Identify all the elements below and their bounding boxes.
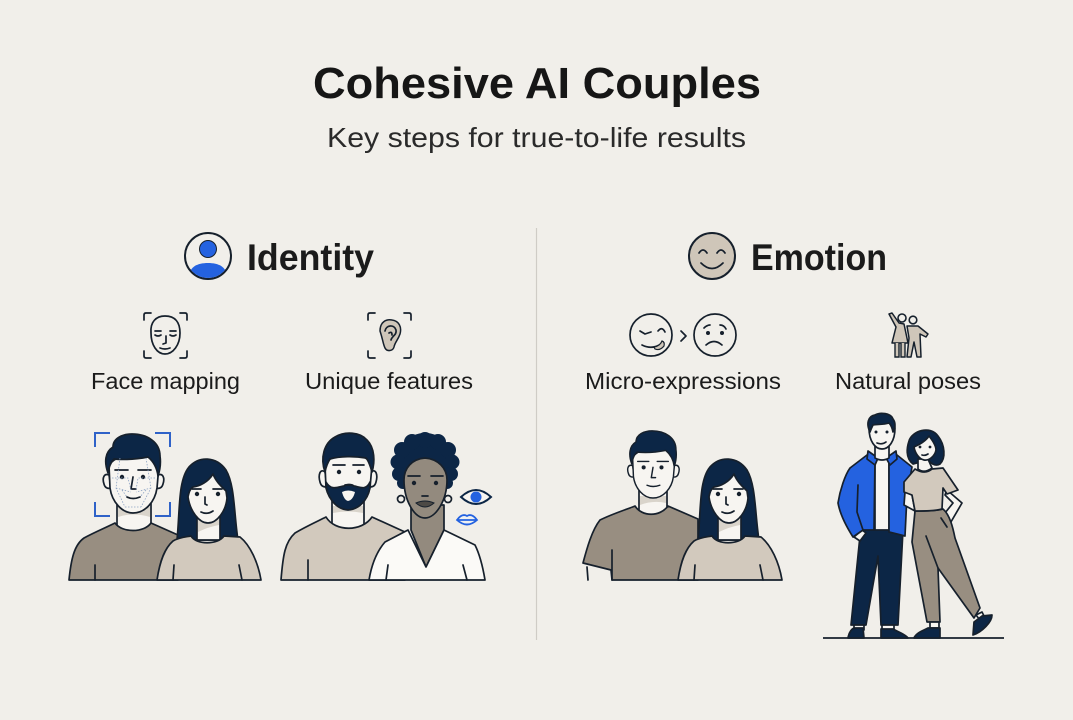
icon: face mapping (144, 313, 187, 358)
illustration: natural poses couple (823, 413, 1004, 638)
standing man (838, 413, 912, 638)
label: face mapping: Face mapping (91, 368, 240, 394)
face scan brackets (95, 433, 170, 516)
woman (157, 459, 261, 580)
man (583, 431, 698, 580)
woman with curly hair (369, 432, 485, 580)
icon: micro-expressions (630, 314, 736, 356)
illustration: face mapping couple (69, 433, 261, 580)
illustration: micro-expressions couple (583, 431, 782, 580)
icon: eye (461, 490, 491, 504)
label: micro-expressions: Micro-expressions (585, 368, 781, 394)
bearded man (281, 433, 405, 580)
heading: identity: Identity (247, 237, 374, 278)
icon: natural poses (889, 313, 928, 357)
woman (678, 459, 782, 580)
icon: unique features (368, 313, 411, 358)
standing woman (904, 430, 992, 638)
icon: lips (457, 515, 477, 524)
icon: identity (185, 233, 231, 280)
icon: emotion (689, 233, 735, 279)
illustration: unique features couple (281, 432, 491, 580)
label: unique features: Unique features (305, 368, 473, 394)
man with face mesh (69, 434, 178, 580)
heading: emotion: Emotion (751, 237, 887, 278)
ground line (823, 637, 1004, 639)
label: natural poses: Natural poses (835, 368, 981, 394)
subtitle: Key steps for true-to-life results (327, 122, 746, 153)
title: Cohesive AI Couples (313, 59, 761, 108)
